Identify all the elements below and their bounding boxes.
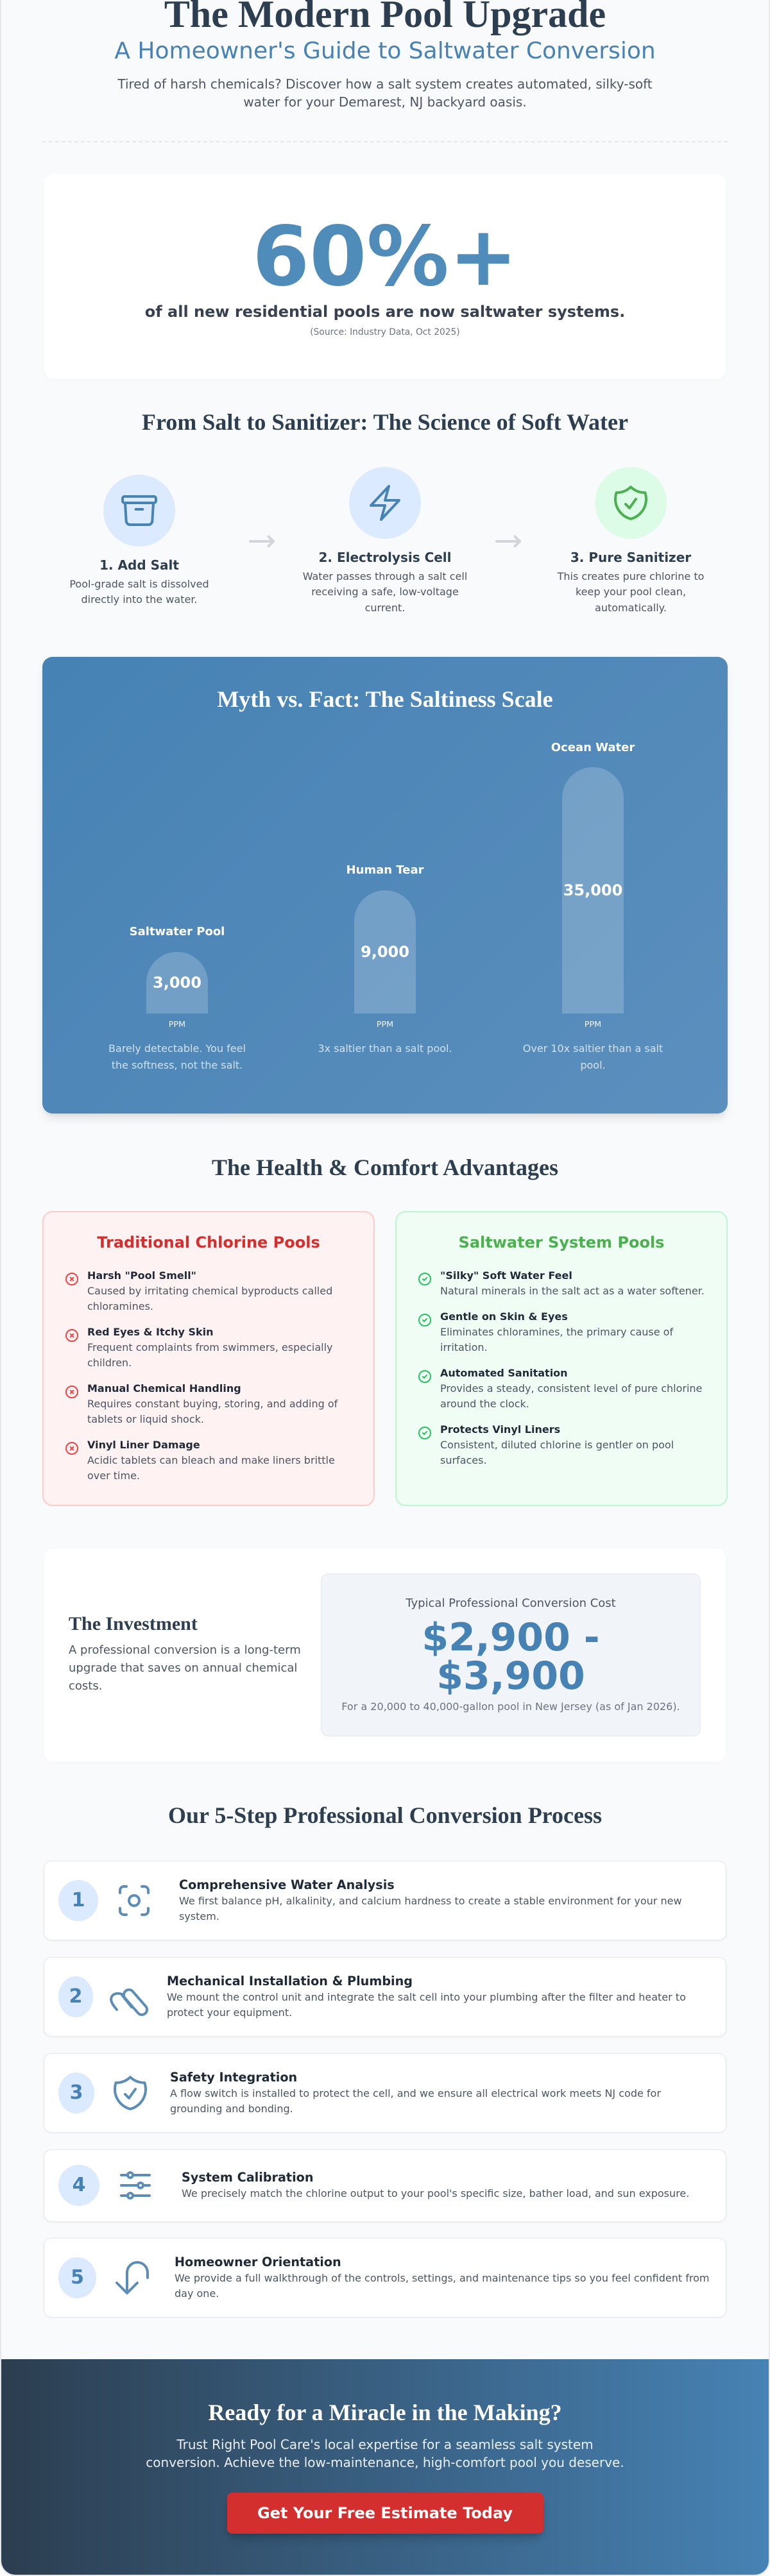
icon: sliders: [115, 2165, 156, 2206]
item title: Red Eyes & Itchy Skin: [87, 1326, 214, 1338]
number badge: [58, 2072, 94, 2114]
step text: day one.: [175, 2287, 219, 2300]
price range: [422, 1615, 600, 1699]
icon: bolt: [349, 467, 421, 539]
item text: [87, 1285, 332, 1312]
step text: [170, 2086, 661, 2117]
item: red eyes: [65, 1326, 332, 1369]
cta text: conversion. Achieve the low-maintenance, high-comfort pool you deserve.: [146, 2455, 624, 2470]
item title: Harsh "Pool Smell": [87, 1269, 196, 1282]
step text: [179, 1894, 682, 1925]
item title: Automated Sanitation: [440, 1367, 568, 1379]
step title: 3. Pure Sanitizer: [570, 550, 691, 565]
step text: We mount the control unit and integrate the salt cell into your plumbing after the filter and heater to: [167, 1991, 686, 2003]
label: Saltwater Pool: [130, 925, 225, 938]
item title: "Silky" Soft Water Feel: [440, 1269, 572, 1282]
step title: System Calibration: [182, 2170, 314, 2185]
step title: Mechanical Installation & Plumbing: [167, 1974, 413, 1988]
item text: over time.: [87, 1470, 140, 1482]
item text: Requires constant buying, storing, and adding of: [87, 1398, 338, 1410]
item text: [440, 1326, 674, 1353]
step text: We precisely match the chlorine output to your pool's specific size, bather load, and sun exposure.: [182, 2187, 689, 2199]
number badge: 3: [70, 2081, 83, 2104]
item title: Manual Chemical Handling: [87, 1382, 241, 1394]
step title: Homeowner Orientation: [175, 2255, 341, 2269]
bar: 35,000: [563, 881, 622, 899]
icon: x: [65, 1273, 78, 1285]
statistic caption: of all new residential pools are now saltwater systems.: [145, 303, 625, 321]
item: pool smell: [65, 1269, 332, 1312]
note: [523, 1042, 663, 1071]
number badge: 1: [72, 1889, 85, 1911]
column: human tear: [318, 863, 452, 1055]
number badge: 5: [71, 2266, 84, 2289]
unit: PPM: [377, 1020, 393, 1030]
number badge: 2: [69, 1985, 82, 2008]
arrow: [249, 535, 275, 548]
cta button: [227, 2493, 543, 2534]
big number: 60%+: [252, 209, 518, 305]
price range: $2,900 -: [422, 1615, 600, 1660]
note: Barely detectable. You feel: [108, 1042, 246, 1055]
icon: wrench: [108, 1987, 150, 2019]
note: [108, 1042, 246, 1071]
panel: 60% statistic: [44, 174, 726, 379]
step text: protect your equipment.: [167, 2006, 292, 2019]
item text: Consistent, diluted chlorine is gentler on pool: [440, 1439, 674, 1451]
heading: process: Our 5-Step Professional Conversion Process: [168, 1802, 602, 1828]
process step 4: [44, 2149, 726, 2222]
icon: u-turn arrow: [112, 2257, 153, 2298]
item: gentle: [418, 1310, 674, 1353]
step: pure sanitizer: [557, 467, 704, 614]
process step 3: [44, 2053, 726, 2133]
icon: check: [418, 1273, 431, 1285]
item text: [440, 1439, 674, 1466]
item text: Frequent complaints from swimmers, especially: [87, 1341, 332, 1353]
process step 1: [44, 1861, 726, 1940]
panel heading: Traditional Chlorine Pools: [97, 1233, 320, 1251]
item text: Eliminates chloramines, the primary cause of: [440, 1326, 673, 1338]
intro text: Tired of harsh chemicals? Discover how a salt system creates automated, silky-soft: [117, 76, 653, 92]
step text: Water passes through a salt cell: [303, 570, 467, 582]
step text: [303, 570, 467, 614]
price range: $3,900: [436, 1654, 585, 1699]
step: electrolysis: [303, 467, 467, 614]
note: pool.: [580, 1059, 606, 1071]
investment text: [69, 1643, 301, 1693]
unit: PPM: [169, 1020, 185, 1030]
item title: Protects Vinyl Liners: [440, 1423, 560, 1436]
label: Ocean Water: [551, 741, 635, 754]
cta heading: Ready for a Miracle in the Making?: [208, 2400, 562, 2425]
step title: 1. Add Salt: [99, 557, 179, 573]
item title: Vinyl Liner Damage: [87, 1439, 200, 1451]
intro text: [117, 76, 653, 110]
step title: 2. Electrolysis Cell: [318, 550, 452, 565]
icon: x: [65, 1385, 78, 1398]
item text: around the clock.: [440, 1398, 529, 1410]
subtitle: A Homeowner's Guide to Saltwater Conversion: [114, 38, 656, 64]
bar: [562, 767, 624, 1013]
step text: keep your pool clean,: [576, 586, 686, 598]
step text: [557, 570, 704, 614]
price note: For a 20,000 to 40,000-gallon pool in New Jersey (as of Jan 2026).: [341, 1700, 680, 1713]
item text: Acidic tablets can bleach and make liners brittle: [87, 1454, 335, 1466]
step title: Comprehensive Water Analysis: [179, 1877, 395, 1892]
bar: 3,000: [153, 974, 201, 992]
item text: Caused by irritating chemical byproducts called: [87, 1285, 332, 1297]
process step 2: [44, 1957, 726, 2037]
panel: saltiness scale: [42, 657, 728, 1114]
label: Human Tear: [346, 863, 424, 877]
number badge: 4: [73, 2174, 85, 2196]
item: liner damage: [65, 1439, 335, 1482]
step text: system.: [179, 1910, 219, 1922]
investment text: costs.: [69, 1679, 102, 1693]
item: vinyl: [418, 1423, 674, 1466]
item text: chloramines.: [87, 1300, 153, 1312]
item text: Provides a steady, consistent level of pure chlorine: [440, 1382, 702, 1394]
cta text: [1, 2436, 769, 2471]
price label: Typical Professional Conversion Cost: [406, 1597, 616, 1610]
note: the softness, not the salt.: [112, 1059, 243, 1071]
step text: This creates pure chlorine to: [558, 570, 704, 582]
icon: shield: [110, 2072, 151, 2114]
panel: saltwater system: [395, 1211, 728, 1506]
item text: tablets or liquid shock.: [87, 1413, 204, 1425]
step text: [69, 578, 209, 606]
icon: salt box: [103, 475, 175, 547]
step text: We provide a full walkthrough of the controls, settings, and maintenance tips so you feel confident from: [175, 2272, 709, 2284]
icon: check: [418, 1370, 431, 1383]
item text: irritation.: [440, 1341, 488, 1353]
step text: automatically.: [595, 602, 667, 614]
note: Over 10x saltier than a salt: [523, 1042, 663, 1055]
icon: check: [418, 1314, 431, 1326]
item: automated: [418, 1367, 702, 1410]
step: add salt: [69, 475, 209, 606]
heading: science: From Salt to Sanitizer: The Science of Soft Water: [142, 409, 628, 435]
price box: [321, 1573, 701, 1736]
intro text: water for your Demarest, NJ backyard oasis.: [243, 94, 527, 110]
icon: x: [65, 1329, 78, 1342]
icon: green shield: [595, 467, 667, 539]
step text: directly into the water.: [81, 593, 198, 606]
item text: surfaces.: [440, 1454, 487, 1466]
item text: children.: [87, 1357, 132, 1369]
item: chemical handling: [65, 1382, 338, 1425]
item text: [440, 1382, 702, 1410]
unit: PPM: [585, 1020, 601, 1030]
step text: grounding and bonding.: [170, 2103, 293, 2115]
source note: (Source: Industry Data, Oct 2025): [310, 327, 460, 337]
column: ocean water: [523, 741, 663, 1071]
step text: Pool-grade salt is dissolved: [69, 578, 209, 590]
item title: Gentle on Skin & Eyes: [440, 1310, 568, 1323]
item: silky: [418, 1269, 705, 1297]
process step 5: [44, 2238, 726, 2318]
panel heading: Saltwater System Pools: [459, 1233, 664, 1251]
bar: [354, 890, 416, 1013]
step text: [167, 1990, 686, 2021]
item text: [87, 1454, 335, 1482]
bar: [146, 952, 208, 1013]
panel title: Myth vs. Fact: The Saltiness Scale: [217, 686, 553, 712]
icon: x: [65, 1442, 78, 1455]
step text: A flow switch is installed to protect the cell, and we ensure all electrical work meets NJ code for: [170, 2087, 661, 2099]
panel: call to action: [1, 2359, 769, 2575]
panel: investment: [44, 1548, 726, 1762]
icon: viewfinder: [114, 1880, 155, 1921]
cta text: Trust Right Pool Care's local expertise for a seamless salt system: [176, 2437, 594, 2452]
investment heading: The Investment: [69, 1613, 198, 1634]
step text: receiving a safe, low-voltage: [311, 586, 459, 598]
column: saltwater pool: [108, 925, 246, 1071]
icon: check: [418, 1427, 431, 1439]
cta button: Get Your Free Estimate Today: [257, 2504, 513, 2522]
step text: [175, 2271, 709, 2302]
heading: advantages: The Health & Comfort Advantages: [212, 1155, 558, 1180]
number badge: [58, 2165, 99, 2206]
number badge: [58, 1976, 93, 2017]
bar: 9,000: [361, 943, 409, 961]
number badge: [58, 2257, 96, 2298]
item text: Natural minerals in the salt act as a water softener.: [440, 1285, 705, 1297]
number badge: [58, 1880, 98, 1921]
step text: We first balance pH, alkalinity, and calcium hardness to create a stable environment for your new: [179, 1895, 682, 1907]
note: 3x saltier than a salt pool.: [318, 1042, 452, 1055]
investment text: A professional conversion is a long-term: [69, 1643, 301, 1657]
arrow: [495, 535, 521, 548]
panel: traditional chlorine: [42, 1211, 375, 1506]
item text: [87, 1398, 338, 1425]
step text: current.: [365, 602, 405, 614]
investment text: upgrade that saves on annual chemical: [69, 1661, 297, 1675]
header: [114, 0, 656, 110]
item text: [87, 1341, 332, 1369]
step title: Safety Integration: [170, 2070, 297, 2085]
